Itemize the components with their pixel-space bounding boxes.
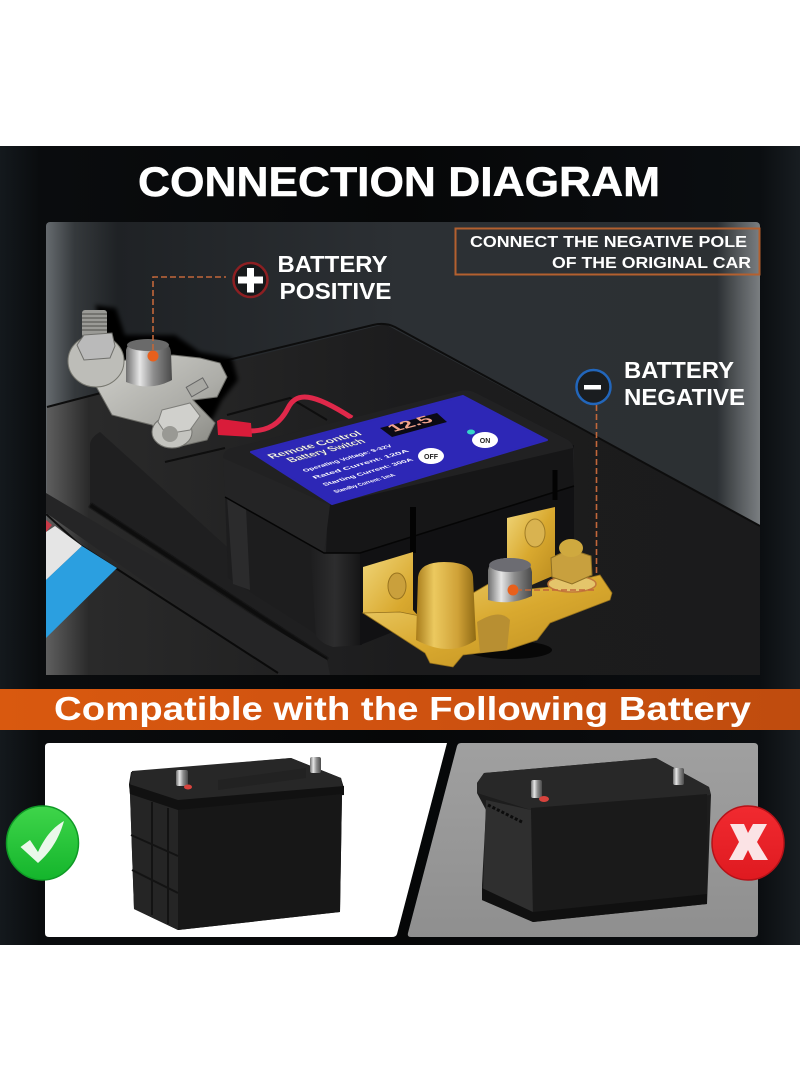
callout: original car negative pole: CONNECT THE NEGATIVE POLE [470,234,747,251]
clamp lower nut [152,403,200,448]
brass cylinder [416,562,476,649]
banner: compatible: Compatible with the Following Battery [54,690,752,727]
positive marker line [148,277,226,362]
label: battery negative: BATTERY [624,357,734,383]
battery top surface [46,324,760,675]
callout: original car negative pole [456,228,760,274]
brass left plate [363,552,440,653]
battery: recessed post type [477,758,711,922]
device specs: Operating Voltage: 9-32V [301,444,395,473]
battery edge groove [46,493,330,675]
device OFF button: OFF [424,454,439,461]
device display [380,413,447,437]
clamp lug [68,335,124,387]
device blue faceplate [251,396,547,504]
clamp bolt [82,310,107,337]
clamp screw [186,378,208,397]
device specs [301,444,415,494]
dark background [0,146,800,945]
device lid [223,390,574,553]
icon: cross mark [712,806,784,880]
battery: top post type [129,757,344,930]
icon: minus [576,370,610,404]
brass flap [477,614,510,653]
battery top recess [90,398,330,660]
label: battery positive [278,251,392,304]
device specs: Rated Current: 120A [311,449,411,480]
panel: connection photo [46,222,760,675]
brass shadow [468,641,552,659]
device LED [467,430,475,434]
callout: original car negative pole: OF THE ORIGINAL CAR [552,255,751,272]
clamp: silver positive terminal [68,310,227,448]
device left highlight [227,497,250,590]
brass base [363,575,612,667]
panel: compatible battery [45,743,447,937]
device ON button [472,432,498,448]
label: battery positive: POSITIVE [280,278,392,304]
clamp body [88,355,227,447]
device right face [360,445,574,645]
device ON button: ON [480,438,490,445]
clamp shadow [95,305,238,420]
brass terminal [363,507,612,667]
device label: Remote Control [265,430,365,460]
device display: 12.5 [382,413,438,434]
label: battery negative [624,357,745,410]
device: battery switch [223,390,574,647]
icon: check mark [6,806,78,880]
device near corner [308,505,362,647]
brass nut [548,539,596,592]
red cable [217,397,352,437]
title: CONNECTION DIAGRAM [138,158,660,205]
device lower left face [225,497,362,647]
icon: plus [234,263,268,297]
clamp post [126,339,172,387]
brass right plate [507,507,555,590]
label: battery positive: BATTERY [278,251,388,277]
device specs: Standby Current: 1mA [332,473,397,494]
banner: compatible [0,689,800,730]
panel: incompatible battery [408,743,758,937]
negative marker line [508,405,596,596]
clamp hex nut [77,333,115,360]
device OFF button [418,448,444,464]
battery label stripes [46,520,117,638]
device label: Battery Switch [284,437,369,464]
device specs: Starting Current: 300A [321,458,415,487]
label: battery negative: NEGATIVE [624,384,745,410]
silver negative post [488,558,532,602]
